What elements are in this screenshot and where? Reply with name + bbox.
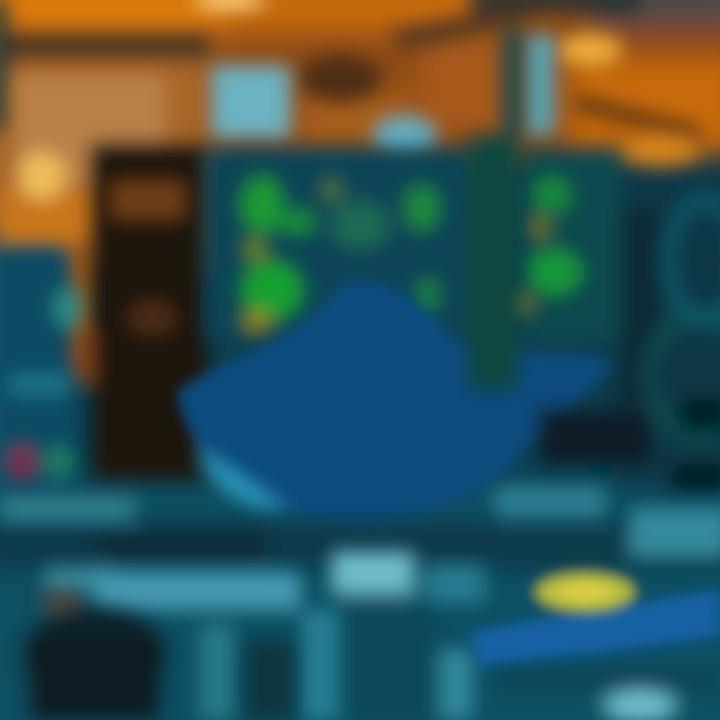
left wall: warm panel with glow [0,75,165,370]
desk: blue panel [470,590,720,666]
desk: yellow light [535,572,635,612]
background: warm ceiling [0,0,720,270]
ceiling: dark beams [0,0,700,145]
left side: teal device [0,250,81,480]
monitor: dark green divider column [468,30,522,390]
right side: dark ring [540,200,720,489]
light spots: top glow [194,0,700,164]
desk: bottom stripes [0,525,720,565]
desk: light stripes [0,487,720,720]
windows: pale blue patches [212,35,554,156]
chart: green patches on screen [240,175,583,333]
bowl: large blue shape [178,281,615,521]
bowl: highlight [195,445,290,512]
monitor: dark teal screen [205,148,660,410]
desk: bottom highlights [500,670,720,720]
background: lower teal field [0,170,720,720]
dark brown column [76,145,208,480]
desk: dark object [23,591,295,720]
